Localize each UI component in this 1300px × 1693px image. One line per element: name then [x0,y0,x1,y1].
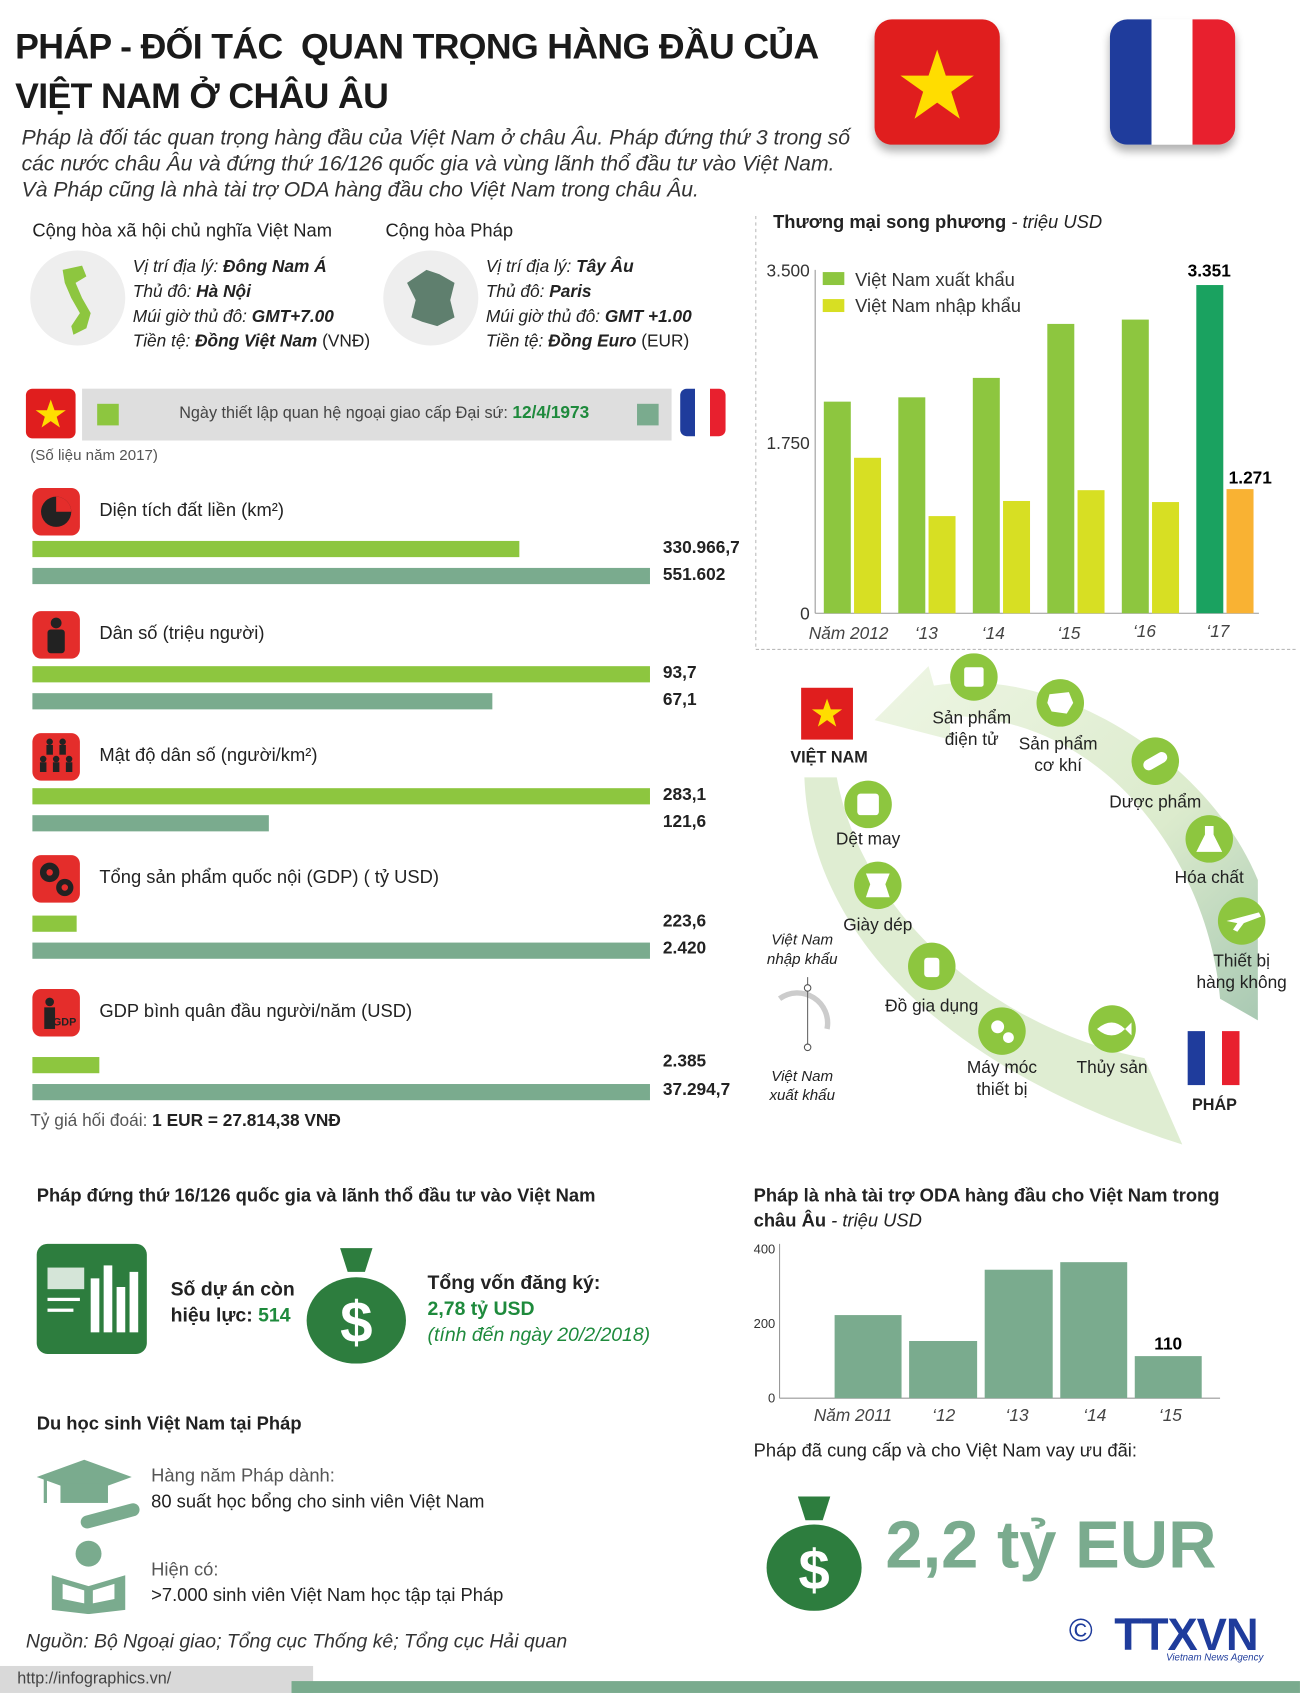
export diagram: Thiết bị [1213,952,1270,971]
export diagram: Giày dép [843,917,912,935]
icon: money bag: $ [340,1290,373,1355]
Vietnam flag small [801,688,853,740]
bilateral trade chart: 1.750 [767,433,810,453]
intro paragraph [22,126,852,202]
export diagram: Hóa chất [1175,869,1244,888]
investment section: 2,78 tỷ USD [428,1298,535,1319]
ODA chart: 400 [754,1242,775,1257]
panel: France info: Cộng hòa Pháp [385,220,513,241]
ODA total callout: Pháp đã cung cấp và cho Việt Nam vay ưu đãi: [754,1440,1137,1461]
stats: population: 93,7 [663,664,697,682]
investment section [36,1186,650,1364]
ODA chart [754,1186,1220,1425]
title [15,26,819,116]
bilateral trade chart: 1.271 [1229,468,1272,488]
export diagram: VIỆT NAM [790,748,868,767]
panel: France info: Vị trí địa lý: Tây Âu [486,258,634,276]
investment section: (tính đến ngày 20/2/2018) [428,1324,650,1345]
export diagram: hàng không [1196,974,1287,992]
export diagram: Dược phẩm [1109,794,1201,812]
icon: student reading [52,1540,126,1614]
ODA chart: ‘15 [1159,1405,1182,1425]
stats: population [32,611,697,710]
footer bar: http://infographics.vn/ [17,1669,171,1688]
logo TTXVN: Vietnam News Agency [1166,1652,1263,1663]
export diagram: Việt Nam [771,1067,833,1084]
logo TTXVN [1069,1609,1264,1663]
stats: GDP per capita: GDP [53,1017,76,1029]
ODA chart: châu Âu - triệu USD [754,1210,922,1231]
ODA chart: ‘12 [932,1405,956,1425]
export diagram: Sản phẩm [932,709,1011,728]
panel: Vietnam info: Thủ đô: Hà Nội [133,283,251,301]
students section: Du học sinh Việt Nam tại Pháp [37,1413,302,1434]
ODA total callout: $ [798,1538,830,1601]
ODA chart: 0 [768,1391,775,1406]
icon: project chart [37,1244,147,1354]
bilateral trade chart: Thương mại song phương - triệu USD [773,212,1102,232]
export diagram: Sản phẩm [1019,735,1097,754]
stats: density: 283,1 [663,786,706,804]
stats: GDP per capita: 37.294,7 [663,1081,730,1099]
investment section: Số dự án còn [171,1278,295,1300]
bilateral trade chart: ‘13 [915,623,938,643]
bilateral trade chart: 3.500 [767,260,810,280]
intro paragraph: Pháp là đối tác quan trọng hàng đầu của Việt Nam ở châu Âu. Pháp đứng thứ 3 trong số [22,126,850,150]
students section [37,1413,503,1614]
export diagram: Dệt may [836,830,900,849]
ODA total callout: 2,2 tỷ EUR [885,1508,1216,1583]
investment section: Tổng vốn đăng ký: [428,1272,600,1293]
stats: land area: 330.966,7 [663,539,740,557]
stats: land area: Diện tích đất liền (km²) [99,500,284,520]
panel: Vietnam info: Tiền tệ: Đồng Việt Nam (VNĐ) [133,333,370,351]
ODA chart: Pháp là nhà tài trợ ODA hàng đầu cho Việt Nam trong [754,1186,1219,1206]
ODA chart: 110 [1154,1334,1182,1354]
stats: land area: 551.602 [663,566,725,584]
panel: Vietnam info [30,220,370,351]
exchange rate note: Tỷ giá hối đoái: 1 EUR = 27.814,38 VNĐ [30,1112,341,1130]
panel: France info: Múi giờ thủ đô: GMT +1.00 [486,308,692,326]
panel: France info: Tiền tệ: Đồng Euro (EUR) [486,333,689,351]
diplomatic relation strip: Ngày thiết lập quan hệ ngoại giao cấp Đại sứ: 12/4/1973 [179,404,589,422]
bilateral trade chart: Năm 2012 [809,623,889,643]
footer bar [0,1666,1300,1693]
source: Nguồn: Bộ Ngoại giao; Tổng cục Thống kê; Tổng cục Hải quan [26,1630,567,1652]
ODA chart: 200 [754,1316,775,1331]
ODA chart: Năm 2011 [814,1405,892,1425]
stats: GDP: 223,6 [663,912,706,931]
ODA total callout [754,1440,1216,1611]
bilateral trade chart: ‘16 [1133,621,1156,641]
export diagram: Việt Nam [771,931,833,948]
investment section: Pháp đứng thứ 16/126 quốc gia và lãnh thổ đầu tư vào Việt Nam [37,1186,595,1206]
export diagram: thiết bị [977,1081,1027,1099]
bilateral trade chart: ‘14 [982,623,1005,643]
export diagram: nhập khẩu [767,950,838,967]
icon: Vietnam flag large [875,19,1000,145]
stats: population: 67,1 [663,691,697,709]
students section: Hiện có: [151,1559,219,1580]
stats: GDP [32,855,706,959]
title: PHÁP - ĐỐI TÁC QUAN TRỌNG HÀNG ĐẦU CỦA [15,26,819,66]
intro paragraph: các nước châu Âu và đứng thứ 16/126 quốc gia và vùng lãnh thổ đầu tư vào Việt Nam. [22,152,834,176]
stats: GDP per capita: 2.385 [663,1053,706,1071]
export diagram: xuất khẩu [769,1086,835,1103]
icon: money bag [306,1248,406,1364]
stats: population: Dân số (triệu người) [99,623,264,644]
diplomatic relation strip [26,388,726,440]
ODA chart: ‘14 [1083,1405,1106,1425]
intro paragraph: Và Pháp cũng là nhà tài trợ ODA hàng đầu cho Việt Nam trong châu Âu. [22,178,699,202]
title: VIỆT NAM Ở CHÂU ÂU [15,76,388,116]
stats: density: 121,6 [663,813,706,831]
students section: Hàng năm Pháp dành: [151,1465,335,1486]
investment section: hiệu lực: 514 [171,1304,291,1326]
students section: 80 suất học bổng cho sinh viên Việt Nam [151,1491,484,1512]
panel: France info: Thủ đô: Paris [486,283,592,301]
stats: GDP per capita: GDP bình quân đầu người/năm (USD) [99,1001,412,1021]
export diagram: điện tử [945,731,999,749]
icon: graduation cap [37,1460,140,1528]
France flag small [1188,1031,1239,1085]
export diagram: Thủy sản [1077,1059,1148,1078]
panel: Vietnam info: Vị trí địa lý: Đông Nam Á [133,258,327,276]
bilateral trade chart: 0 [800,604,810,624]
stats: GDP: Tổng sản phẩm quốc nội (GDP) ( tỷ USD) [99,867,439,888]
bilateral trade chart: Việt Nam xuất khẩu [855,269,1015,290]
stats: GDP per capita [32,989,730,1100]
logo TTXVN: © [1069,1613,1093,1649]
bilateral trade chart: Việt Nam nhập khẩu [855,295,1021,316]
stats: GDP: 2.420 [663,939,706,958]
icon: France flag large [1110,19,1235,145]
export diagram: cơ khí [1034,757,1082,775]
bilateral trade chart: ‘15 [1057,623,1081,643]
students section: >7.000 sinh viên Việt Nam học tập tại Pháp [151,1585,503,1606]
ODA chart: ‘13 [1006,1405,1029,1425]
bilateral trade chart: ‘17 [1206,621,1231,641]
export diagram: Máy móc [967,1059,1037,1078]
panel: Vietnam info: Múi giờ thủ đô: GMT+7.00 [133,308,334,326]
logo TTXVN: TTXVN [1114,1609,1257,1659]
bilateral trade chart [755,212,1272,647]
stats: density [32,733,706,832]
stats: land area [32,488,740,584]
export diagram: Đồ gia dụng [885,998,978,1016]
stats: density: Mật độ dân số (người/km²) [99,745,317,766]
text: (Số liệu năm 2017) [30,446,158,463]
bilateral trade chart: 3.351 [1188,260,1231,280]
export diagram [767,653,1287,1144]
panel: Vietnam info: Cộng hòa xã hội chủ nghĩa Việt Nam [32,220,332,241]
export diagram: PHÁP [1192,1096,1237,1114]
panel: France info [384,220,692,351]
